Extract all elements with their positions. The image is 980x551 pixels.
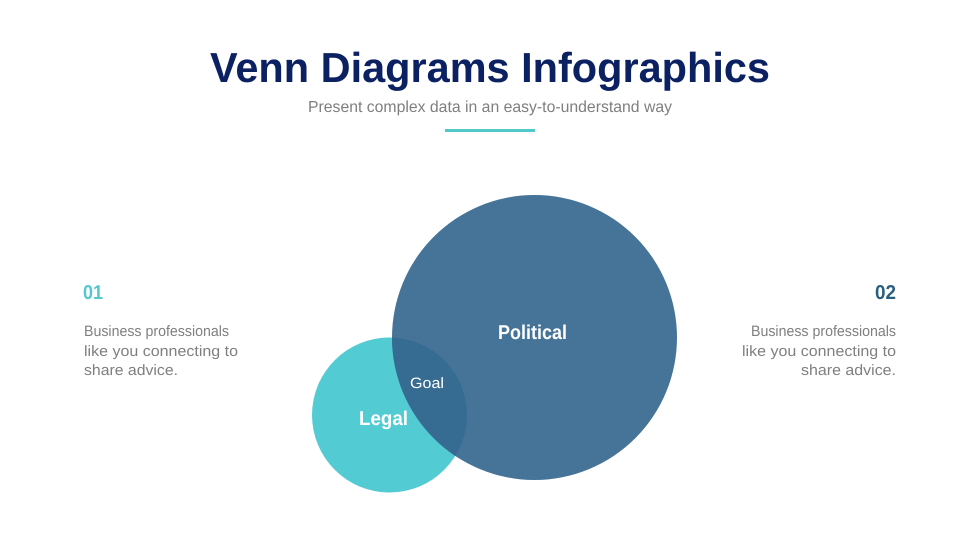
venn diagram bbox=[312, 195, 677, 492]
description 02: Business professionals bbox=[751, 323, 896, 340]
overlap: goal region bbox=[392, 338, 467, 456]
accent underline bbox=[445, 129, 535, 132]
circle: political bbox=[392, 195, 677, 480]
left block: item 01 bbox=[83, 282, 238, 379]
number 01: 01 bbox=[83, 282, 103, 304]
description 01: like you connecting to bbox=[84, 343, 238, 360]
description 01: Business professionals bbox=[84, 323, 229, 340]
right block: item 02 bbox=[742, 282, 896, 379]
title: Venn Diagrams Infographics bbox=[210, 44, 770, 91]
description 02: like you connecting to bbox=[742, 343, 896, 360]
description 01 bbox=[84, 323, 238, 379]
label: political: Political bbox=[498, 322, 567, 344]
circle: legal bbox=[312, 338, 467, 492]
number 02: 02 bbox=[875, 282, 896, 304]
label: legal: Legal bbox=[359, 408, 408, 430]
description 02 bbox=[742, 323, 896, 379]
description 01: share advice. bbox=[84, 362, 178, 379]
subtitle: Present complex data in an easy-to-understand way bbox=[308, 99, 672, 116]
description 02: share advice. bbox=[801, 362, 896, 379]
label: goal: Goal bbox=[410, 375, 444, 392]
